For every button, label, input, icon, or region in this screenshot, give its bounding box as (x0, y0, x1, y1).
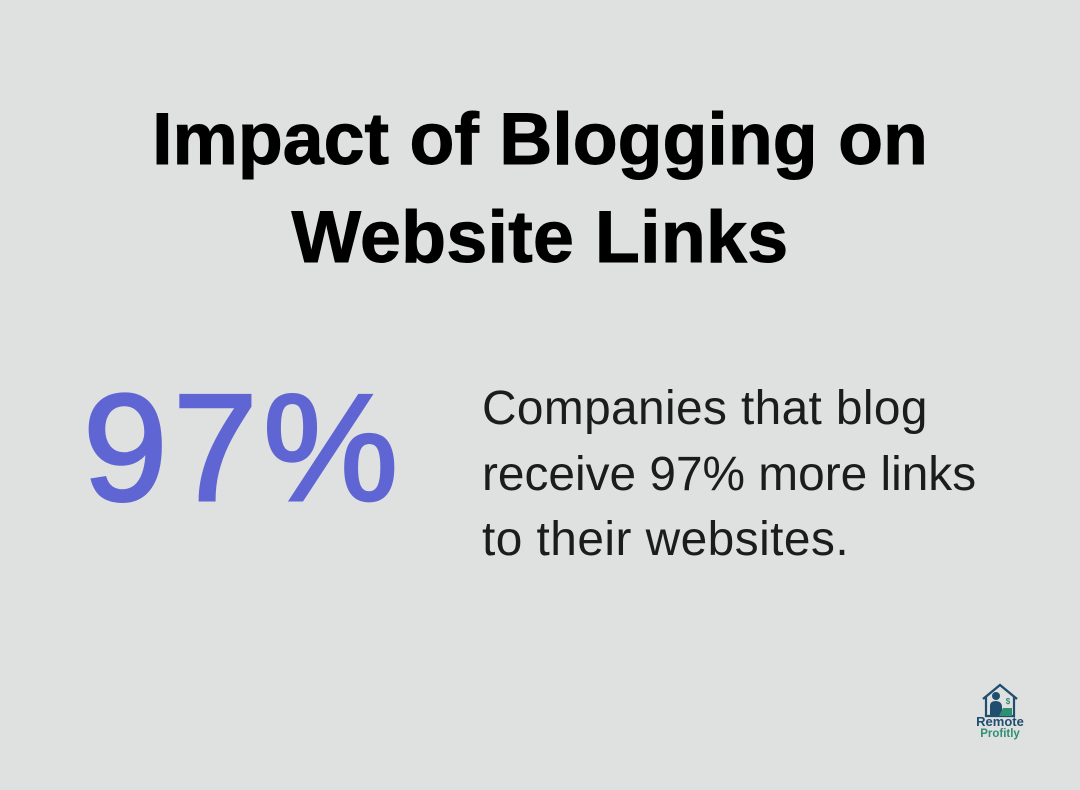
big stat: 97%: 97% (83, 363, 404, 533)
description text: Companies that blog (482, 382, 928, 435)
description text: receive 97% more links (482, 448, 976, 500)
title: Impact of Blogging on (152, 97, 928, 180)
title: Website Links (292, 195, 788, 278)
icon: house with person and laptop (982, 684, 1018, 718)
logo: Remote Profitly (976, 684, 1024, 740)
logo wordmark: Remote (976, 714, 1024, 729)
description text (482, 382, 976, 566)
logo wordmark (976, 714, 1024, 740)
icon: house with person and laptop: $ (1006, 697, 1011, 706)
title (152, 97, 928, 278)
description text: to their websites. (482, 513, 849, 566)
logo wordmark: Profitly (980, 728, 1020, 740)
